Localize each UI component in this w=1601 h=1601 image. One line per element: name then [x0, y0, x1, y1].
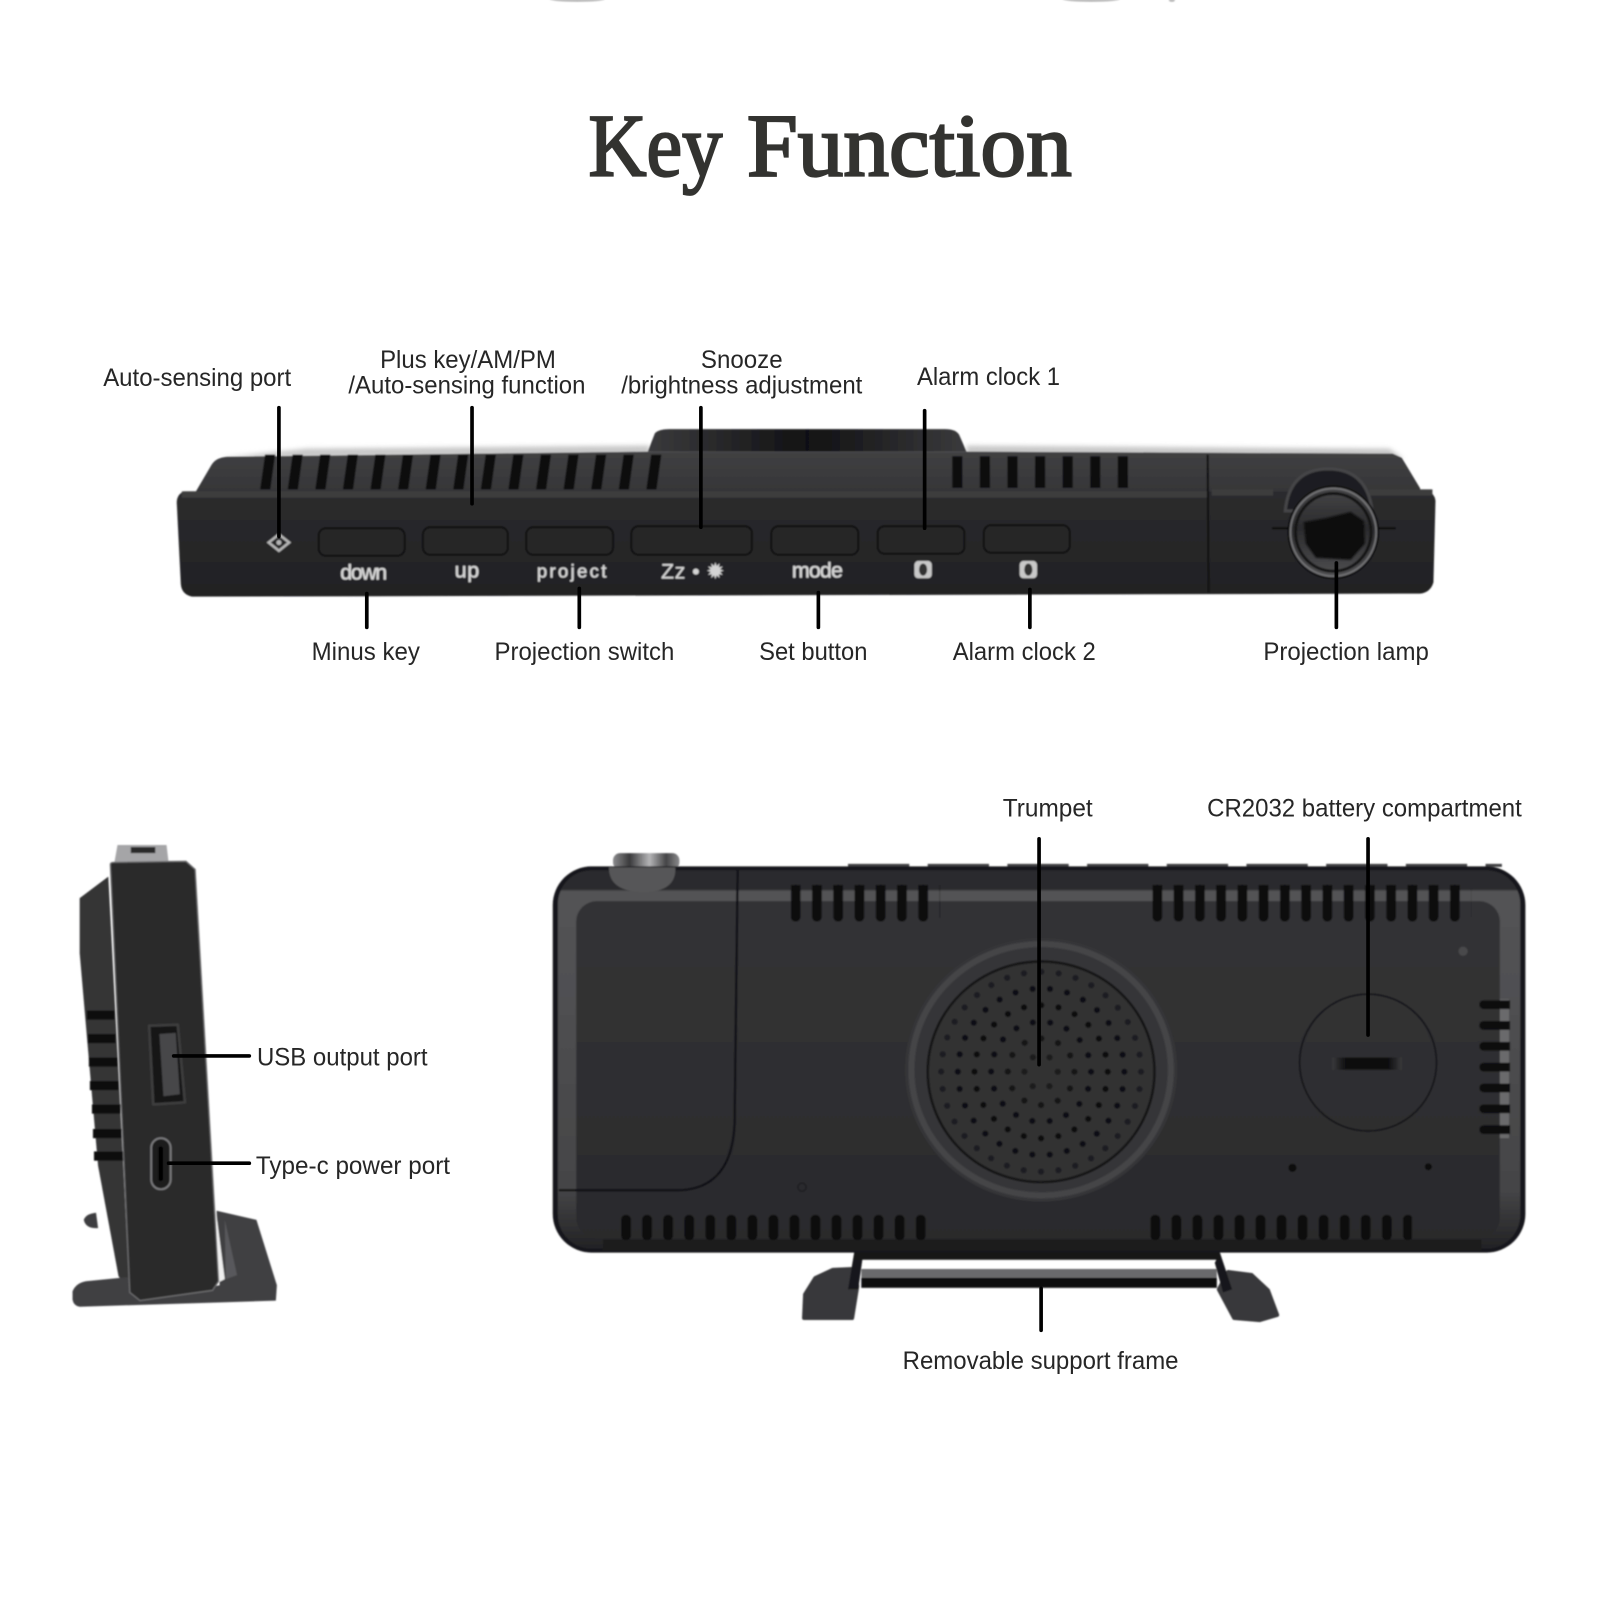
label: alarm clock 1: Alarm clock 1 — [917, 364, 1060, 391]
title: Function — [747, 98, 1072, 196]
back view of clock — [553, 853, 1525, 1320]
label: USB output port: USB output port — [257, 1045, 428, 1072]
label: minus key: Minus key — [312, 639, 421, 666]
side body — [110, 861, 219, 1301]
stand feet and frame — [804, 1249, 1277, 1320]
key label: up: up — [455, 558, 479, 582]
title: Key — [588, 98, 723, 196]
callout lines — [169, 408, 1368, 1330]
lit top edge haze — [220, 445, 1404, 459]
stand inner slot — [217, 1216, 225, 1282]
raised dome at top edge — [648, 429, 967, 452]
speaker grille — [905, 938, 1177, 1202]
USB port — [149, 1025, 185, 1104]
stand nub — [84, 1213, 98, 1228]
sloped top face — [194, 452, 1420, 501]
label: auto-sensing port: Auto-sensing port — [103, 365, 291, 392]
top vents right — [952, 457, 1129, 488]
label: projection switch: Projection switch — [495, 639, 674, 666]
label: trumpet: Trumpet — [1003, 795, 1093, 822]
top view of clock — [177, 429, 1435, 597]
key label: snooze and brightness: Zz • ✹ — [661, 559, 724, 583]
knob top metal — [613, 853, 679, 869]
icon: alarm 2 — [1020, 561, 1037, 578]
top edge tabs — [848, 864, 1502, 867]
front face — [177, 491, 1435, 597]
label: projection lamp: Projection lamp — [1263, 639, 1429, 666]
auto-sensing sensor icon — [269, 534, 289, 551]
button: alarm 1 — [878, 526, 964, 554]
button: project — [526, 527, 613, 555]
cropped fragments at top edge — [550, 0, 1175, 2]
screw holes — [798, 947, 1468, 1191]
battery compartment cover — [1300, 994, 1437, 1131]
label: auto-sensing function: /Auto-sensing function — [348, 372, 585, 399]
lamp section divider — [1208, 455, 1209, 593]
top vents left — [263, 455, 662, 489]
key label: mode: mode — [792, 558, 843, 582]
knob at top — [114, 845, 169, 862]
button: alarm 2 — [984, 525, 1070, 553]
button: snooze — [631, 526, 752, 555]
side view of clock — [73, 845, 277, 1307]
underside strip — [603, 1239, 1481, 1251]
label: battery compartment: CR2032 battery compartment — [1207, 795, 1522, 822]
label: brightness adjustment: /brightness adjustment — [621, 372, 862, 399]
projection lamp — [1272, 469, 1396, 579]
title — [588, 98, 1072, 196]
rear of housing — [80, 877, 130, 1292]
right side vents — [1479, 999, 1510, 1138]
label: plus key: Plus key/AM/PM — [380, 347, 556, 374]
label: snooze: Snooze — [701, 347, 783, 374]
knob collar — [609, 867, 675, 892]
housing — [553, 866, 1525, 1253]
key label: down: down — [340, 560, 387, 584]
side stand — [73, 1211, 277, 1307]
button: up — [423, 527, 508, 555]
label: removable support frame: Removable support frame — [903, 1348, 1179, 1375]
projector cover panel — [559, 869, 738, 1190]
upper vents right — [1152, 885, 1471, 922]
label: alarm clock 2: Alarm clock 2 — [953, 639, 1096, 666]
key label: project: project — [537, 560, 607, 581]
button: down — [319, 528, 405, 556]
stand strip — [225, 1220, 237, 1279]
button: mode — [771, 526, 858, 555]
upper vents left — [791, 885, 940, 922]
label: set button: Set button — [759, 639, 867, 666]
label: type-c power port: Type-c power port — [256, 1153, 450, 1180]
front ledge highlight — [182, 492, 1432, 495]
icon: alarm 1 — [914, 561, 932, 578]
lower vents left — [621, 1215, 934, 1240]
lower vents right — [1150, 1215, 1412, 1240]
side vents — [87, 1010, 124, 1161]
USB-C port — [151, 1138, 171, 1189]
